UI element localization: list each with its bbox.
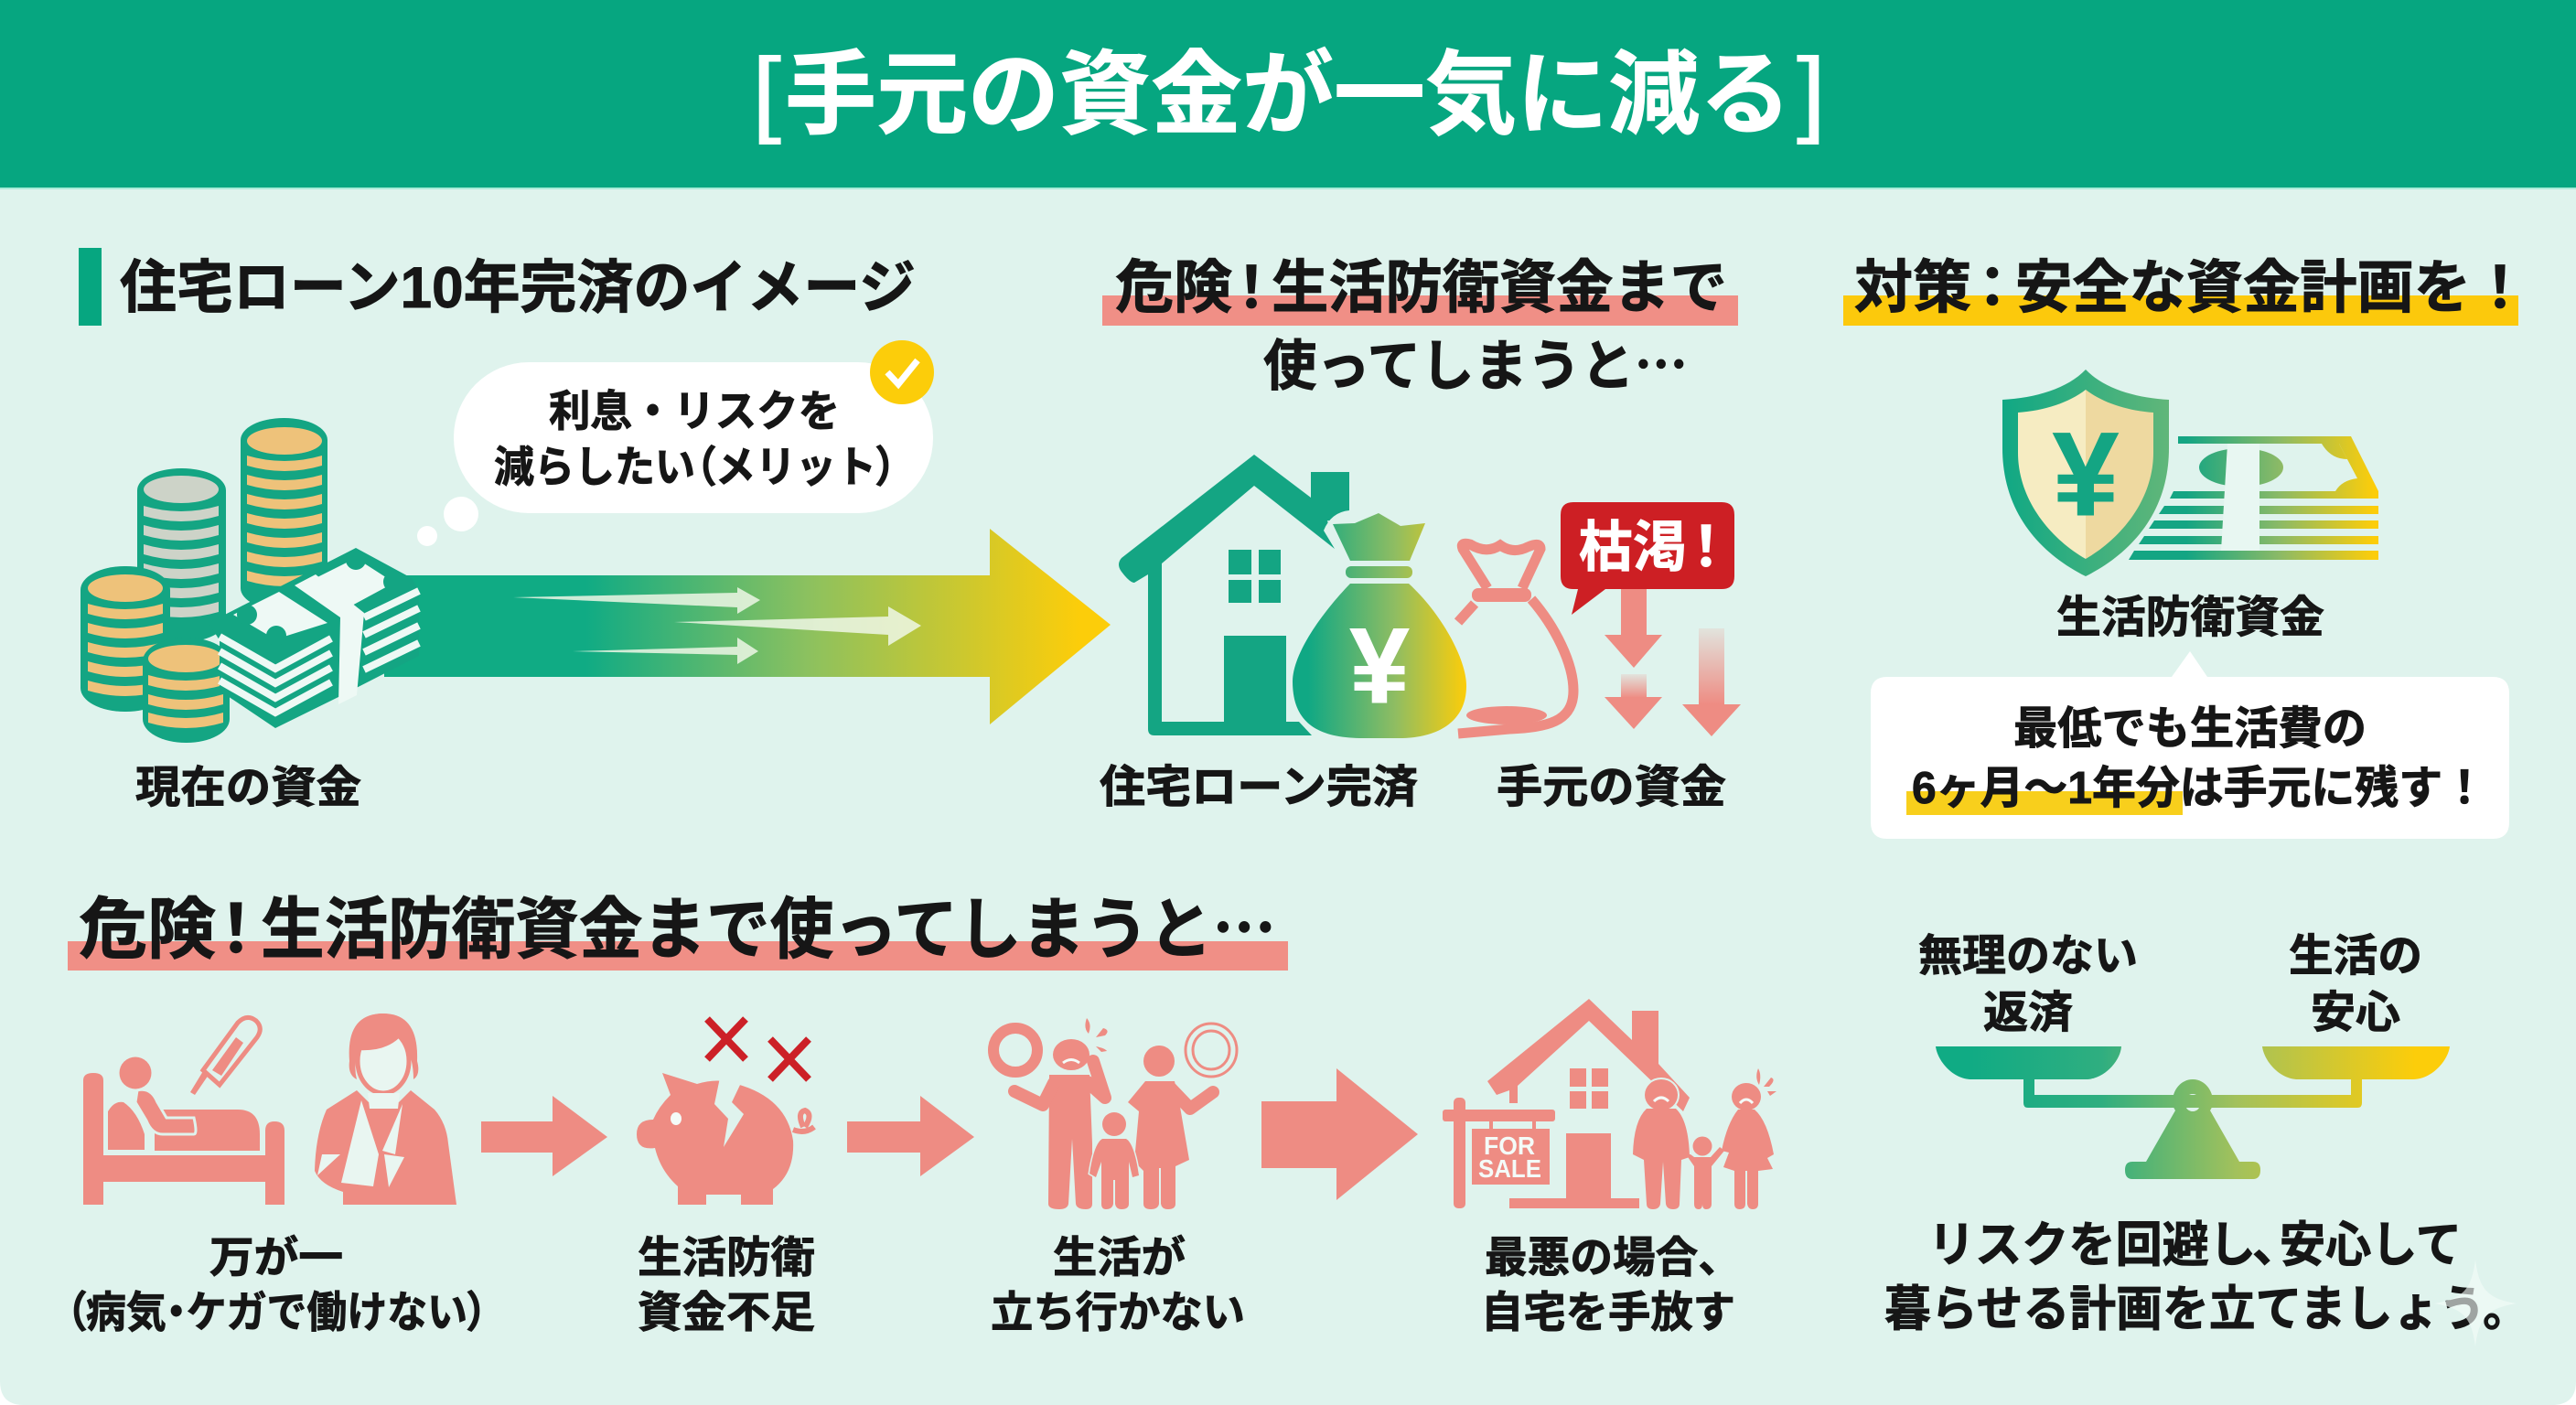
small white arrows	[513, 587, 921, 664]
title: 手元の資金が一気に減る	[785, 44, 1791, 146]
cash bundle	[209, 548, 419, 728]
label: loan repaid: 住宅ローン完済	[1100, 763, 1418, 812]
icon: for sale sign: FOR	[1484, 1132, 1535, 1160]
step labels	[66, 1233, 1741, 1336]
heading: danger small: ！	[1223, 257, 1280, 320]
panel: loan repayment image	[79, 248, 1741, 812]
bubble text	[494, 387, 896, 491]
front coin stack	[143, 638, 230, 743]
icon: yellow check badge	[870, 340, 934, 404]
heading: countermeasure	[1843, 256, 2528, 326]
header band	[0, 0, 2576, 189]
icon: full money bag: ¥	[1349, 606, 1410, 725]
heading: countermeasure: ：	[1964, 257, 2021, 320]
heading: danger small: 危険	[1115, 256, 1232, 320]
closing message: 暮らせる計画を立てましょう。	[1884, 1282, 2529, 1336]
big gradient arrow	[384, 529, 1111, 724]
bubble text: 利息・リスクを	[549, 387, 840, 435]
heading: danger small: 生活防衛資金まで	[1272, 256, 1727, 320]
closing message: 、	[2252, 1218, 2301, 1272]
label: current funds: 現在の資金	[135, 764, 361, 812]
icon: for sale sign: SALE	[1478, 1154, 1541, 1183]
panel: countermeasure	[1843, 256, 2529, 1346]
heading: danger large: 生活防衛資金まで使ってしまうと…	[261, 875, 1276, 972]
heading: countermeasure: 対策	[1854, 256, 1971, 320]
icon: house for sale	[1443, 999, 1690, 1208]
step labels: 万が一	[209, 1233, 343, 1282]
label: peace of mind: 生活の	[2289, 932, 2422, 981]
heading: danger small: 使ってしまうと…	[1263, 322, 1688, 402]
closing message: 安心して	[2280, 1218, 2462, 1272]
callout: depleted: 枯渇	[1579, 517, 1687, 578]
closing message: リスクを回避し	[1928, 1218, 2256, 1272]
icon: family with worried faces	[1633, 1068, 1776, 1209]
heading: danger small	[1102, 256, 1738, 402]
arrow 1	[481, 1096, 607, 1176]
icon: thermometer	[190, 1017, 260, 1095]
step labels: 最悪の場合、	[1485, 1233, 1741, 1282]
step labels: 資金不足	[638, 1288, 815, 1336]
label: funds on hand: 手元の資金	[1497, 763, 1726, 812]
icon: cash stack	[2129, 436, 2378, 560]
label: manageable repayment: 無理のない	[1918, 932, 2138, 981]
title: [	[752, 39, 781, 145]
grey coin stack	[137, 468, 226, 642]
panel: danger chain	[66, 875, 1776, 1336]
arrow 2	[847, 1096, 974, 1176]
icon: balance scale	[1936, 1046, 2450, 1179]
callout: depleted: ！	[1679, 517, 1733, 578]
callout: depleted	[1561, 502, 1734, 615]
icon: for sale sign	[1443, 1098, 1555, 1208]
icon: coin stacks and cash	[80, 418, 419, 743]
closing message	[1884, 1218, 2529, 1336]
label: manageable repayment	[1918, 932, 2138, 1037]
label: peace of mind: 安心	[2311, 989, 2400, 1037]
label: emergency fund: 生活防衛資金	[2056, 594, 2324, 642]
step 1: illness or injury	[83, 1014, 456, 1205]
icon: patient in bed	[83, 1017, 284, 1205]
step labels: 生活防衛	[638, 1233, 815, 1282]
icon: red crosses	[707, 1019, 809, 1079]
heading: countermeasure: ！	[2472, 257, 2528, 320]
icon: falling arrows	[1605, 589, 1741, 736]
icon: empty money bag	[1458, 543, 1573, 734]
icon: worried family	[993, 1018, 1237, 1209]
step labels: 自宅を手放す	[1481, 1288, 1735, 1336]
icon: broken piggy bank	[637, 1073, 814, 1205]
step 3: cannot make ends meet	[993, 1018, 1237, 1209]
heading: danger large: ！	[203, 894, 269, 967]
tall coin stack	[241, 418, 327, 610]
callout: keep 6-12 months: 6ヶ月〜1年分は手元に残す！	[1912, 764, 2486, 813]
thought bubble	[417, 340, 934, 546]
heading: loan image: 住宅ローン10年完済のイメージ	[120, 256, 916, 320]
bubble text: 減らしたい（メリット）	[494, 443, 896, 491]
heading: danger large: 危険	[79, 893, 216, 967]
arrow 3	[1261, 1068, 1418, 1200]
label: peace of mind	[2289, 932, 2422, 1037]
icon: shield with yen: ¥	[2053, 407, 2119, 541]
title: ]	[1797, 39, 1826, 145]
icon: full money bag	[1293, 513, 1466, 738]
step labels: 生活が	[1053, 1233, 1186, 1282]
label: manageable repayment: 返済	[1983, 989, 2073, 1037]
step labels: 立ち行かない	[991, 1288, 1245, 1336]
callout: keep 6-12 months: 最低でも生活費の	[2013, 704, 2367, 754]
step 4: sell the home	[1443, 999, 1776, 1209]
icon: shield with yen	[2002, 370, 2169, 576]
left coin stack	[80, 566, 170, 712]
decorative sparkle	[2434, 1260, 2517, 1346]
icon: house	[1119, 455, 1349, 735]
icon: man in sling	[315, 1014, 456, 1205]
callout: keep 6-12 months	[1871, 651, 2509, 839]
step 2: insufficient emergency fund	[637, 1019, 814, 1205]
heading: countermeasure: 安全な資金計画を	[2015, 256, 2471, 320]
step labels: （病気・ケガで働けない）	[66, 1288, 488, 1336]
